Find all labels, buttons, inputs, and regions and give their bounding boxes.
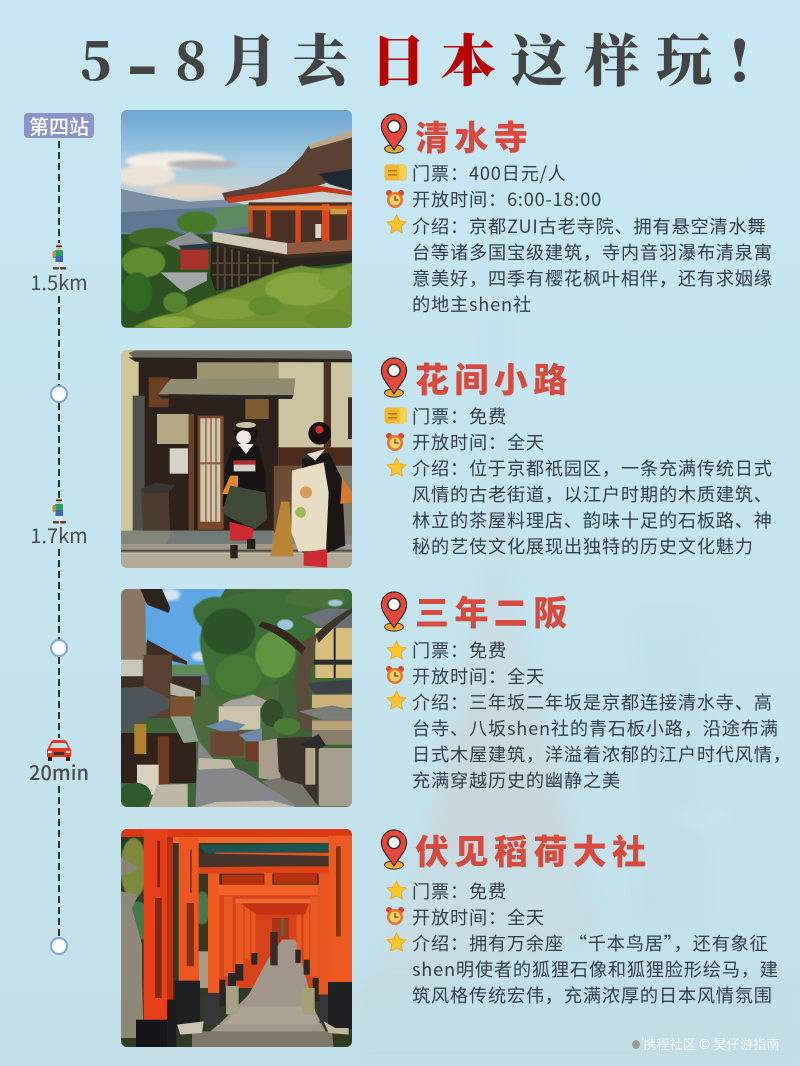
- text: introduction: 意美好，四季有樱花枫叶相伴，还有求姻缘: [412, 265, 773, 291]
- text: introduction: 林立的茶屋料理店、韵味十足的石板路、神: [412, 507, 773, 533]
- title: 样: [584, 18, 640, 98]
- icon: star: [386, 640, 406, 660]
- title: 本: [440, 18, 496, 98]
- title: 去: [292, 18, 348, 98]
- right building: [315, 628, 352, 678]
- title: 这: [511, 18, 567, 98]
- text: introduction: 的地主shen社: [412, 291, 532, 317]
- text: introduction: 秘的艺伎文化展现出独特的历史文化魅力: [412, 533, 754, 559]
- text: introduction: 介绍：三年坂二年坂是京都连接清水寺、高: [412, 689, 773, 715]
- heading: 花间小路: 花间小路: [415, 353, 573, 402]
- text: introduction: 筑风格传统宏伟，充满浓厚的日本风情氛围: [412, 982, 773, 1008]
- midground houses: [169, 675, 212, 711]
- path: [192, 940, 334, 1047]
- text: opening hours: 开放时间：全天: [412, 429, 545, 455]
- icon: walker 2: [52, 498, 66, 524]
- shrubs: [261, 699, 283, 727]
- stop marker 1: [50, 385, 68, 403]
- text: ticket price: 门票：400日元/人: [412, 160, 567, 186]
- icon: star: [386, 457, 406, 477]
- section: Fushimi Inari: [380, 829, 408, 870]
- text: opening hours: 开放时间：全天: [412, 904, 545, 930]
- pipe and bin: [133, 396, 145, 531]
- stone lantern: [121, 858, 139, 875]
- title: 月: [222, 18, 278, 98]
- text: ticket price: 门票：免费: [412, 637, 507, 663]
- icon: ticket: [384, 164, 406, 180]
- icon: map pin: [380, 829, 408, 870]
- eaves: [129, 350, 352, 362]
- title: 日: [370, 18, 426, 98]
- big tree canopy: [193, 588, 352, 700]
- foreground trees: [132, 262, 352, 329]
- photo: Kiyomizu-dera: [121, 110, 352, 642]
- small pagoda: [165, 232, 212, 250]
- text: introduction: [412, 455, 773, 559]
- door: [198, 416, 224, 530]
- temple deck and railing: [213, 232, 287, 255]
- distance label: 1.5km: 1.5km: [30, 267, 88, 296]
- text: introduction: 风情的古老街道，以江户时期的木质建筑、: [412, 481, 773, 507]
- text: introduction: 介绍：拥有万余座 “千本鸟居”，还有象征: [412, 930, 769, 956]
- walker: [270, 932, 278, 965]
- geisha left: [234, 422, 258, 446]
- section: Sannenzaka: [380, 591, 408, 632]
- text: ticket price: 门票：免费: [412, 403, 507, 429]
- stop marker 3: [50, 937, 68, 955]
- inner torii: [224, 896, 320, 976]
- icon: map pin: [380, 591, 408, 632]
- icon: car: [47, 740, 71, 761]
- tree trunk: [295, 635, 317, 733]
- dark roof: [199, 843, 329, 853]
- photo: Sannenzaka lane: [121, 589, 352, 807]
- icon: alarm clock: [386, 666, 404, 684]
- left houses: [121, 589, 146, 660]
- distance label: 1.7km: 1.7km: [30, 520, 88, 549]
- right railing: [274, 466, 352, 532]
- icon: alarm clock: [386, 907, 404, 925]
- text: introduction: [412, 689, 792, 793]
- far tunnel: [215, 895, 322, 988]
- watermark: 携程社区 © 昊仔游指南: [643, 1034, 780, 1053]
- text: opening hours: 开放时间：6:00-18:00: [412, 186, 602, 212]
- title: 5: [80, 20, 112, 95]
- heading: 清水寺: 清水寺: [415, 111, 533, 160]
- icon: star: [386, 880, 406, 900]
- photo: Fushimi Inari torii: [121, 829, 352, 1047]
- text: introduction: 介绍：位于京都祇园区，一条充满传统日式: [412, 455, 773, 481]
- right lower walls: [259, 738, 280, 781]
- icon: map pin: [380, 113, 408, 154]
- stop badge: 第四站: [29, 111, 89, 140]
- heading: 三年二阪: 三年二阪: [415, 586, 573, 635]
- road: [195, 741, 295, 807]
- mid torii: [208, 873, 219, 995]
- title: [80, 0, 750, 130]
- travel label: 20min: 20min: [29, 757, 89, 786]
- icon: star: [386, 214, 406, 234]
- title: !: [729, 18, 750, 98]
- ground: [121, 531, 352, 546]
- text: opening hours: 开放时间：全天: [412, 663, 545, 689]
- icon: ticket: [384, 408, 406, 424]
- text: introduction: [412, 213, 773, 317]
- title: 玩: [656, 18, 712, 98]
- icon: alarm clock: [386, 433, 404, 451]
- section: Hanamikoji: [380, 357, 408, 398]
- temple roof: [222, 132, 352, 201]
- text: introduction: 台等诸多国宝级建筑，寺内音羽瀑布清泉寓: [412, 239, 773, 265]
- text: introduction: 日式木屋建筑，洋溢着浓郁的江户时代风情，: [412, 741, 792, 767]
- front torii: [121, 829, 352, 837]
- text: ticket price: 门票：免费: [412, 878, 507, 904]
- temple hall: [249, 202, 352, 244]
- section: Kiyomizu-dera: [380, 113, 408, 154]
- text: introduction: 充满穿越历史的幽静之美: [412, 767, 621, 793]
- icon: star: [386, 932, 406, 952]
- text: introduction: shen明使者的狐狸石像和狐狸脸形绘马，建: [412, 956, 779, 982]
- cone basket: [270, 502, 294, 556]
- geisha right: [308, 422, 331, 445]
- icon: alarm clock: [386, 190, 404, 208]
- photo: Hanamikoji street: [121, 350, 352, 568]
- title: 8: [175, 20, 207, 95]
- text: introduction: [412, 930, 779, 1008]
- icon: walker 1: [52, 244, 66, 270]
- text: introduction: 介绍：京都ZUI古老寺院、拥有悬空清水舞: [412, 213, 766, 239]
- icon: map pin: [380, 357, 408, 398]
- heading: 伏见稻荷大社: 伏见稻荷大社: [415, 825, 651, 874]
- stop marker 2: [50, 639, 68, 657]
- temple substructure: [210, 244, 352, 291]
- icon: star: [386, 690, 406, 710]
- torii inscriptions: [155, 841, 341, 998]
- text: introduction: 台寺、八坂shen社的青石板小路，沿途布满: [412, 715, 779, 741]
- stones: [226, 986, 239, 1014]
